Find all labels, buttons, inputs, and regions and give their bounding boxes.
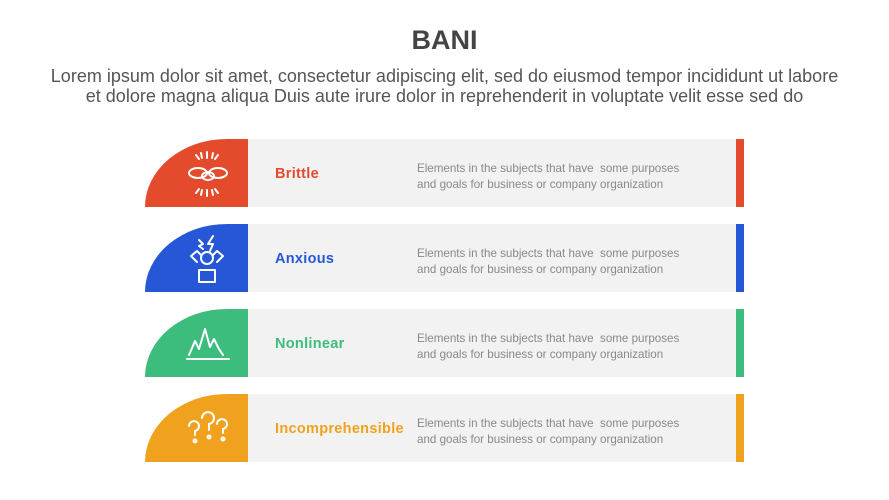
icon: broken chain xyxy=(188,151,228,197)
title: BANI xyxy=(412,25,478,55)
label: Anxious xyxy=(275,251,334,267)
description: and goals for business or company organization xyxy=(417,348,663,360)
description xyxy=(417,332,679,360)
label: Nonlinear xyxy=(275,336,345,352)
icon: anxious person xyxy=(190,235,224,283)
description: Elements in the subjects that have some purposes xyxy=(417,162,679,175)
label: Brittle xyxy=(275,166,319,182)
row: Incomprehensible xyxy=(145,394,744,462)
description xyxy=(417,162,679,190)
description xyxy=(417,247,679,276)
description: Elements in the subjects that have some purposes xyxy=(417,332,679,345)
description: and goals for business or company organization xyxy=(417,262,663,276)
subtitle xyxy=(51,66,838,106)
row: Anxious xyxy=(145,224,744,292)
row: Nonlinear xyxy=(145,309,744,377)
row: Brittle xyxy=(145,139,744,207)
label: Incomprehensible xyxy=(275,421,404,437)
icon: question marks xyxy=(188,411,228,444)
subtitle: Lorem ipsum dolor sit amet, consectetur adipiscing elit, sed do eiusmod tempor incididunt ut labore xyxy=(51,66,838,86)
description: and goals for business or company organization xyxy=(417,178,663,190)
icon: nonlinear graph xyxy=(186,328,230,360)
description: and goals for business or company organization xyxy=(417,432,663,446)
subtitle: et dolore magna aliqua Duis aute irure dolor in reprehenderit in voluptate velit esse sed do xyxy=(86,86,803,106)
description: Elements in the subjects that have some purposes xyxy=(417,417,679,430)
description: Elements in the subjects that have some purposes xyxy=(417,247,679,260)
description xyxy=(417,417,679,446)
